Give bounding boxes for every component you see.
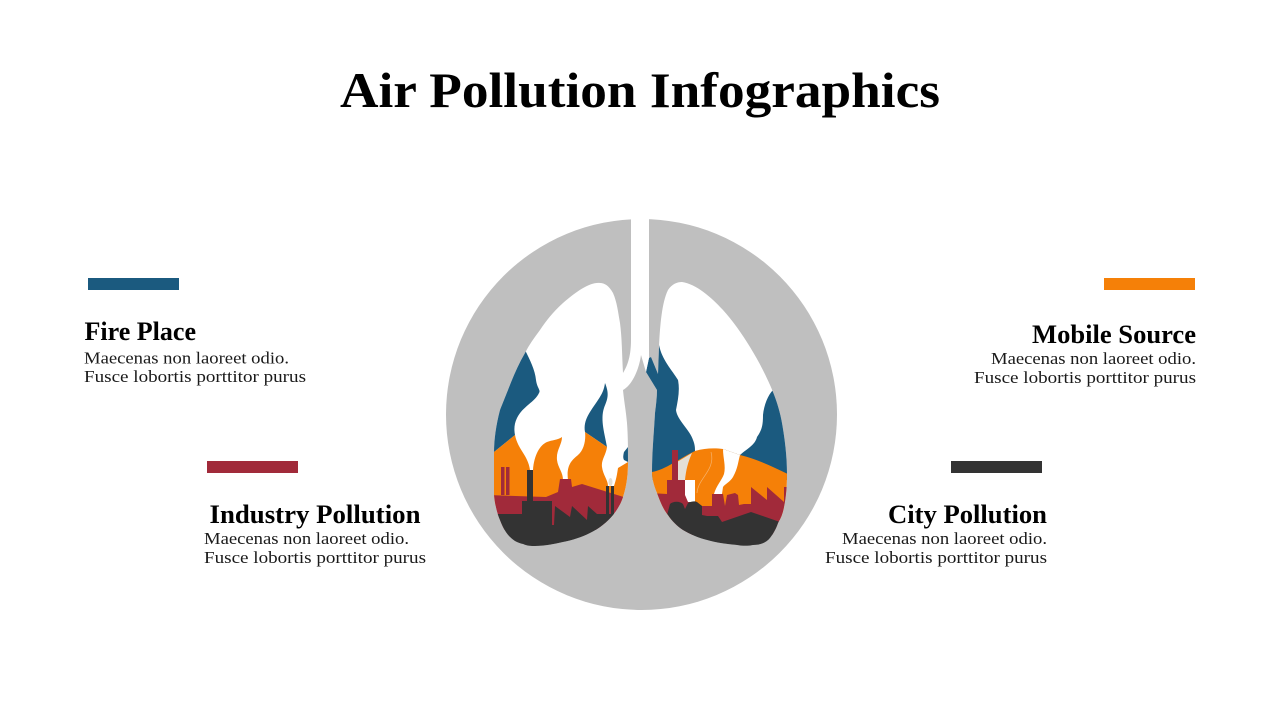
description — [825, 529, 1047, 567]
blue bar — [88, 278, 179, 290]
dark bar — [951, 461, 1042, 473]
grey circle backdrop — [446, 219, 837, 610]
panel: fire place — [84, 278, 306, 386]
panel: industry pollution — [204, 461, 426, 567]
description: Maecenas non laoreet odio. — [991, 349, 1196, 368]
description: Fusce lobortis porttitor purus — [825, 548, 1047, 567]
heading: Mobile Source — [1032, 320, 1196, 349]
heading: Industry Pollution — [210, 500, 421, 529]
title: Air Pollution Infographics — [340, 62, 940, 118]
trachea and bronchi — [623, 215, 649, 390]
panel: mobile source — [974, 278, 1196, 387]
description: Maecenas non laoreet odio. — [842, 529, 1047, 548]
left lung — [494, 282, 628, 546]
description: Fusce lobortis porttitor purus — [974, 368, 1196, 387]
lungs illustration — [446, 215, 837, 610]
description: Maecenas non laoreet odio. — [84, 348, 289, 368]
right lung — [646, 282, 787, 546]
description: Maecenas non laoreet odio. — [204, 529, 409, 548]
panel: city pollution — [825, 461, 1048, 567]
description — [204, 529, 426, 567]
description: Fusce lobortis porttitor purus — [204, 548, 426, 567]
description — [84, 348, 306, 386]
red bar — [207, 461, 298, 473]
description — [974, 349, 1196, 387]
heading: Fire Place — [84, 317, 196, 346]
orange bar — [1104, 278, 1195, 290]
heading: City Pollution — [888, 500, 1048, 529]
description: Fusce lobortis porttitor purus — [84, 367, 306, 386]
